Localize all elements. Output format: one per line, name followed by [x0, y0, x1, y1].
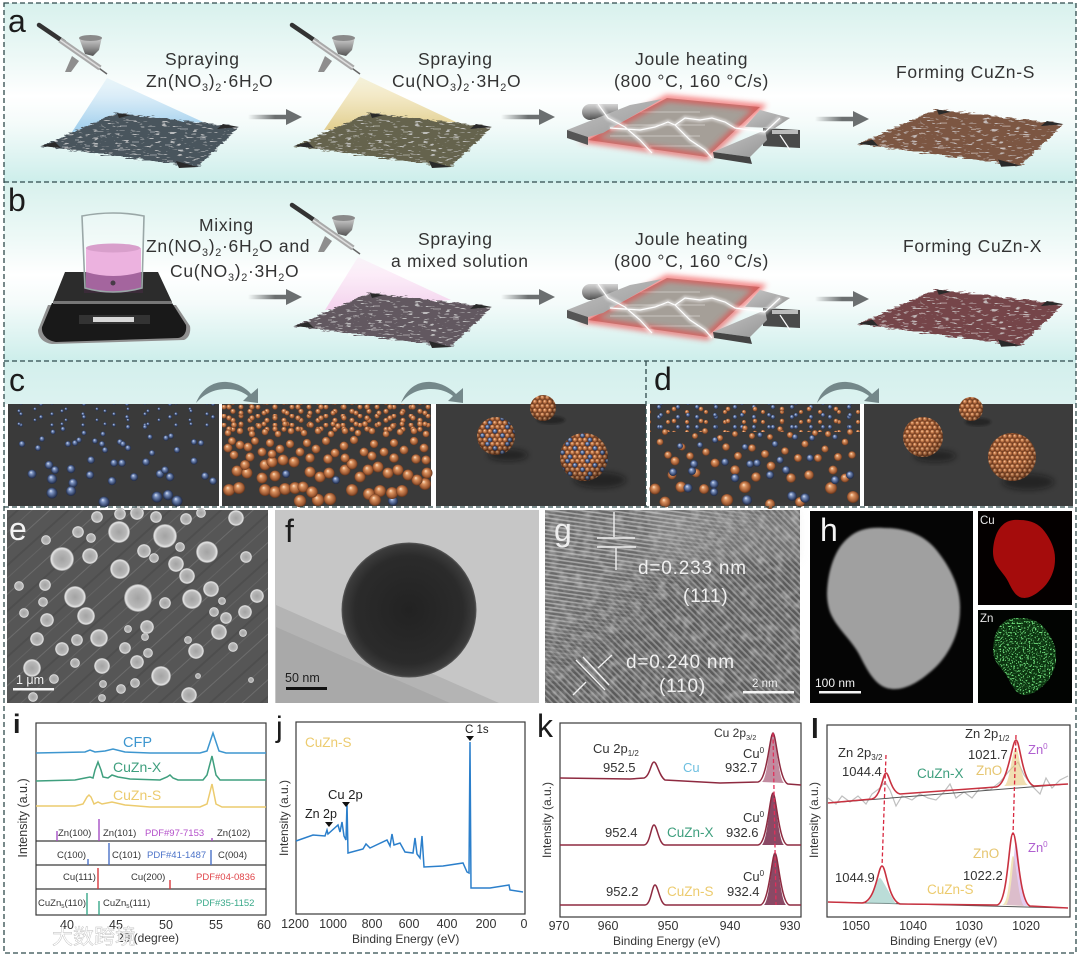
- label CuZn-S: CuZn-S: [113, 787, 161, 803]
- text: spraying zinc nitrate: ·6H: [222, 71, 252, 91]
- labels CuZn-S: Zn: [1028, 840, 1043, 855]
- arrow 1: [248, 289, 302, 305]
- lattice spacing label 110: [626, 652, 735, 697]
- text: spraying copper nitrate: Cu(NO: [392, 71, 450, 91]
- text: spraying copper nitrate: 2: [463, 82, 470, 94]
- CuZn-X trace: [560, 793, 801, 845]
- text: mixing: 3: [228, 272, 235, 284]
- labels CuZn-X: 1/2: [998, 734, 1010, 743]
- labels CuZn-X: 3/2: [871, 753, 883, 762]
- panel letter i: i: [13, 709, 21, 739]
- y axis title: Intensity (a.u.): [16, 778, 30, 858]
- labels row CuZn-S: [606, 869, 765, 899]
- chart frame: [560, 723, 801, 917]
- text: forming CuZn-S: Forming CuZn-S: [896, 62, 1035, 82]
- panel letter l: l: [811, 713, 819, 744]
- map: Zn: Zn: [980, 613, 993, 625]
- icon: stirring hot plate with beaker: [38, 213, 190, 344]
- text: spraying zinc nitrate: O: [259, 71, 273, 91]
- panel letter b: b: [8, 182, 26, 218]
- labels CuZn-S: ZnO: [973, 846, 999, 861]
- mesh mauve-grey: [294, 293, 492, 348]
- arrow 1: [248, 109, 302, 125]
- labels row CuZn-X: Cu: [743, 810, 760, 825]
- labels row CuZn-X: 0: [760, 810, 765, 819]
- labels row Cu: Cu 2p: [714, 726, 746, 740]
- labels row Cu: 1/2: [628, 749, 639, 758]
- text: mixing: ·6H: [222, 236, 252, 256]
- trace CuZn-S: [36, 784, 266, 807]
- image: zinc atoms on substrate: [8, 404, 219, 508]
- text: spraying zinc nitrate: 2: [252, 82, 259, 94]
- labels row CuZn-X: 932.6: [726, 825, 759, 840]
- text: spraying copper nitrate: ·3H: [470, 71, 500, 91]
- icon: airbrush 1: [38, 24, 107, 74]
- labels CuZn-X: Zn: [1028, 742, 1043, 757]
- text: mixing: O: [285, 261, 299, 281]
- image: copper-rich spheres: [864, 397, 1073, 506]
- panel h: HAADF and elemental maps: [810, 511, 1072, 703]
- labels row CuZn-S: Cu: [743, 869, 760, 884]
- x axis ticks and labels: 55: [209, 918, 223, 932]
- mesh olive: [294, 113, 492, 168]
- reference Zn sticks and labels: Zn(100): [58, 828, 91, 839]
- x axis labels: 1030: [955, 919, 983, 933]
- panel letter a: a: [8, 3, 26, 39]
- scale bar 1 micron: 1 μm: [16, 673, 44, 687]
- spray cone blue: [72, 78, 203, 132]
- watermark: [14, 926, 136, 949]
- chart frame: [827, 725, 1070, 917]
- scale bar 1 micron: [13, 673, 54, 690]
- reference Cu sticks and labels: [63, 868, 255, 889]
- labels row Cu: [593, 726, 765, 775]
- panel k: Cu 2p XPS chart: [537, 708, 801, 948]
- Cu trace: [560, 733, 801, 785]
- scale bar 2 nm: [743, 678, 794, 694]
- peak reference dashed line: [773, 733, 776, 905]
- panel d: co-deposition schematic: [646, 361, 1076, 509]
- labels CuZn-S: CuZn-S: [927, 882, 974, 897]
- lattice annotation 110: [573, 655, 612, 695]
- reference CuZn5 sticks and labels: CuZn: [38, 898, 61, 909]
- x axis labels: [549, 919, 800, 933]
- joule heating device: [567, 98, 800, 164]
- reference C sticks and labels: C(100): [57, 850, 86, 861]
- x axis labels: 0: [521, 917, 528, 931]
- x axis ticks and labels: 50: [159, 918, 173, 932]
- panel letter d: d: [654, 361, 672, 397]
- x axis title: 2θ (degree): [117, 931, 179, 945]
- spray cone pink: [325, 257, 451, 310]
- map: Cu: [978, 511, 1072, 605]
- x axis labels: 950: [658, 919, 678, 933]
- text: mixing: 2: [241, 272, 248, 284]
- x axis labels: [281, 917, 528, 931]
- mesh CuZn-X reddish: [858, 290, 1064, 347]
- panel letter k: k: [537, 708, 554, 744]
- map: Zn: [978, 610, 1072, 703]
- x axis labels: 1200: [281, 917, 309, 931]
- panel l: Zn 2p XPS chart: [807, 713, 1070, 948]
- labels row CuZn-S: 952.2: [606, 884, 639, 899]
- reference C sticks and labels: PDF#41-1487: [147, 850, 206, 861]
- scale bar 50 nm: 50 nm: [285, 671, 320, 685]
- reference C sticks and labels: C(004): [218, 850, 247, 861]
- label CFP: CFP: [123, 735, 152, 751]
- labels row CuZn-X: 952.4: [605, 825, 638, 840]
- x axis labels: 800: [362, 917, 382, 931]
- CuZn-X baseline and fit: [828, 740, 1068, 803]
- x axis labels: 400: [437, 917, 457, 931]
- panel j: XPS survey chart: [275, 711, 528, 946]
- lattice annotation 111: [597, 512, 636, 570]
- text: mixing: ): [209, 236, 215, 256]
- survey trace: [296, 742, 523, 892]
- peak label C 1s: [465, 724, 489, 741]
- text: spraying mixed solution: Spraying: [418, 229, 493, 249]
- labels CuZn-S: 1044.9: [835, 870, 875, 885]
- scale bar 100 nm: 100 nm: [815, 676, 855, 690]
- x axis title: Binding Energy (eV): [890, 934, 997, 948]
- text: spraying zinc nitrate: ): [209, 71, 215, 91]
- text: mixing: Zn(NO: [146, 236, 202, 256]
- reference Cu sticks and labels: PDF#04-0836: [196, 872, 255, 883]
- x axis ticks and labels: 40: [60, 918, 74, 932]
- text: mixing: [146, 215, 310, 284]
- text: spraying copper nitrate: ): [457, 71, 463, 91]
- watermark: 大数跨境: [52, 926, 136, 949]
- x axis labels: 1000: [319, 917, 347, 931]
- panel c: sequential deposition schematic: [4, 361, 646, 508]
- reference Zn sticks and labels: Zn(101): [103, 828, 136, 839]
- lattice spacing label 110: (110): [659, 676, 706, 697]
- labels CuZn-X: 1021.7: [968, 747, 1008, 762]
- reference Zn sticks and labels: [57, 819, 250, 841]
- panel e: SEM image: [7, 506, 268, 703]
- x axis labels: 960: [598, 919, 618, 933]
- joule heating device: [567, 278, 800, 344]
- reference CuZn5 sticks and labels: (110): [65, 898, 86, 909]
- labels CuZn-X: Zn 2p: [965, 726, 998, 741]
- peak label Zn 2p: [305, 807, 337, 827]
- panel letter j: j: [275, 711, 283, 744]
- icon: airbrush 3: [291, 204, 360, 254]
- labels CuZn-X: Zn 2p: [838, 745, 871, 760]
- text: joule heating: (800 °C, 160 °C/s): [614, 71, 769, 91]
- x axis ticks and labels: 45: [109, 918, 123, 932]
- labels CuZn-X: [838, 726, 1048, 781]
- panel a: spraying CuZn-S process: [4, 3, 1076, 182]
- panel letter c: c: [9, 362, 25, 398]
- reference Cu sticks and labels: Cu(111): [63, 872, 96, 883]
- arrow 2: [501, 109, 555, 125]
- text: spraying mixed solution: [391, 229, 529, 271]
- reference C sticks and labels: [57, 843, 247, 865]
- y axis title: Intensity (a.u.): [540, 782, 554, 858]
- arrow 3: [815, 291, 869, 307]
- x axis labels: 970: [549, 919, 569, 933]
- text: joule heating: Joule heating: [635, 49, 748, 69]
- spray cone yellow: [324, 77, 456, 130]
- x axis title: Binding Energy (eV): [613, 934, 720, 948]
- scale bar 50 nm: [285, 671, 327, 690]
- text: spraying copper nitrate: 3: [450, 82, 457, 94]
- arrow 2: [501, 289, 555, 305]
- reference Zn sticks and labels: PDF#97-7153: [145, 828, 204, 839]
- text: joule heating: Joule heating: [635, 229, 748, 249]
- text: mixing: ·3H: [248, 261, 278, 281]
- curved arrow 1: [196, 382, 258, 403]
- text: spraying zinc nitrate: Zn(NO: [146, 71, 202, 91]
- lattice spacing label 111: d=0.233 nm: [638, 558, 747, 579]
- label CuZn-X: CuZn-X: [113, 759, 162, 775]
- text: mixing: 2: [215, 247, 222, 259]
- curved arrow 2: [401, 382, 463, 403]
- reference Zn sticks and labels: Zn(102): [217, 828, 250, 839]
- x axis ticks and labels: 60: [257, 918, 271, 932]
- chart frame: [36, 723, 266, 915]
- text: joule heating: [614, 49, 769, 91]
- text: joule heating: [614, 229, 769, 271]
- text: spraying zinc nitrate: [146, 49, 273, 94]
- labels CuZn-S: 0: [1043, 840, 1048, 849]
- text: forming CuZn-X: Forming CuZn-X: [903, 236, 1042, 256]
- text: spraying copper nitrate: 2: [500, 82, 507, 94]
- lattice spacing label 111: [638, 558, 747, 607]
- arrow 3: [815, 111, 869, 127]
- x axis labels: 930: [780, 919, 800, 933]
- reference CuZn5 sticks and labels: PDF#35-1152: [196, 898, 254, 909]
- x axis labels: [842, 919, 1040, 933]
- labels CuZn-S: [835, 840, 1048, 897]
- text: spraying zinc nitrate: 3: [202, 82, 209, 94]
- reference Cu sticks and labels: Cu(200): [131, 872, 165, 883]
- text: spraying mixed solution: a mixed solution: [391, 251, 529, 271]
- panel letter h: h: [820, 512, 838, 548]
- label CuZn-S: CuZn-S: [305, 735, 352, 750]
- labels row CuZn-S: 932.4: [727, 884, 760, 899]
- labels row Cu: 932.7: [725, 760, 758, 775]
- reference CuZn5 sticks and labels: [38, 893, 254, 915]
- labels row Cu: Cu: [683, 760, 700, 775]
- CuZn-S trace: [560, 853, 801, 905]
- labels CuZn-X: 1044.4: [842, 764, 882, 779]
- x axis labels: 200: [476, 917, 496, 931]
- text: mixing: Mixing: [199, 215, 254, 235]
- labels row Cu: Cu: [743, 746, 760, 761]
- text: spraying copper nitrate: [392, 49, 521, 94]
- labels row Cu: 3/2: [746, 733, 756, 742]
- mesh CuZn-S brown: [858, 110, 1064, 167]
- scale bar 100 nm: [815, 676, 861, 694]
- text: joule heating: (800 °C, 160 °C/s): [614, 251, 769, 271]
- peak label Cu 2p: Cu 2p: [328, 787, 363, 802]
- panel i: XRD chart: [13, 709, 271, 945]
- CuZn-X noisy raw data: [828, 762, 1068, 806]
- reference CuZn5 sticks and labels: (111): [130, 898, 150, 909]
- reference CuZn5 sticks and labels: CuZn: [103, 898, 126, 909]
- x axis labels: 940: [720, 919, 740, 933]
- panel g: HRTEM image: [545, 510, 800, 703]
- reference CuZn5 sticks and labels: 5: [126, 904, 130, 910]
- lattice spacing label 111: (111): [683, 586, 729, 607]
- mesh blue-grey: [41, 113, 239, 168]
- text: mixing: ): [235, 261, 241, 281]
- labels row CuZn-S: CuZn-S: [667, 884, 714, 899]
- x axis labels: 1040: [899, 919, 927, 933]
- CuZn-S baseline and fit: [828, 833, 1068, 908]
- labels row Cu: 0: [760, 746, 765, 755]
- text: mixing: 2: [278, 272, 285, 284]
- image: copper atoms covering zinc: [222, 404, 432, 507]
- labels row Cu: Cu 2p: [593, 741, 628, 756]
- text: mixing: Cu(NO: [170, 261, 228, 281]
- scale bar 2 nm: 2 nm: [752, 678, 778, 690]
- y axis title: Intensity (a.u.): [277, 780, 291, 856]
- text: mixing: O and: [259, 236, 310, 256]
- chart frame: [296, 722, 525, 914]
- trace CFP: [36, 733, 266, 753]
- panel f: TEM image: [275, 510, 539, 703]
- x axis labels: 1050: [842, 919, 870, 933]
- peak label Zn 2p: Zn 2p: [305, 807, 337, 821]
- panel letter g: g: [554, 512, 572, 548]
- labels CuZn-X: ZnO: [976, 763, 1002, 778]
- x axis labels: 600: [399, 917, 419, 931]
- panel letter f: f: [285, 513, 294, 549]
- labels CuZn-X: 0: [1043, 742, 1048, 751]
- text: mixing: 2: [252, 247, 259, 259]
- x axis ticks and labels: [60, 918, 271, 932]
- panel letter e: e: [9, 511, 27, 547]
- labels row CuZn-X: [605, 810, 765, 840]
- labels CuZn-X: CuZn-X: [917, 766, 964, 781]
- reference CuZn5 sticks and labels: 5: [61, 904, 65, 910]
- x axis title: Binding Energy (eV): [352, 932, 459, 946]
- text: spraying copper nitrate: O: [507, 71, 521, 91]
- labels row CuZn-S: 0: [760, 869, 765, 878]
- text: spraying zinc nitrate: 2: [215, 82, 222, 94]
- map: Cu: Cu: [980, 515, 995, 527]
- icon: airbrush 2: [291, 24, 360, 74]
- labels row Cu: 952.5: [603, 760, 636, 775]
- trace CuZn-X: [36, 756, 266, 781]
- curved arrow 3: [817, 382, 879, 403]
- x axis labels: 1020: [1012, 919, 1040, 933]
- reference C sticks and labels: C(101): [112, 850, 141, 861]
- text: spraying copper nitrate: Spraying: [418, 49, 493, 69]
- peak label C 1s: C 1s: [465, 724, 489, 736]
- dashed reference lines: [882, 735, 1016, 867]
- image: mixed copper and zinc atoms: [650, 404, 860, 509]
- lattice spacing label 110: d=0.240 nm: [626, 652, 735, 673]
- labels row CuZn-X: CuZn-X: [667, 825, 714, 840]
- text: spraying zinc nitrate: Spraying: [165, 49, 240, 69]
- text: mixing: 3: [202, 247, 209, 259]
- y axis title: Intensity (a.u.): [807, 782, 821, 858]
- image: alloy spheres with surface zinc: [436, 395, 646, 506]
- panel b: mixed spraying CuZn-X process: [4, 182, 1076, 361]
- labels CuZn-S: 1022.2: [963, 868, 1003, 883]
